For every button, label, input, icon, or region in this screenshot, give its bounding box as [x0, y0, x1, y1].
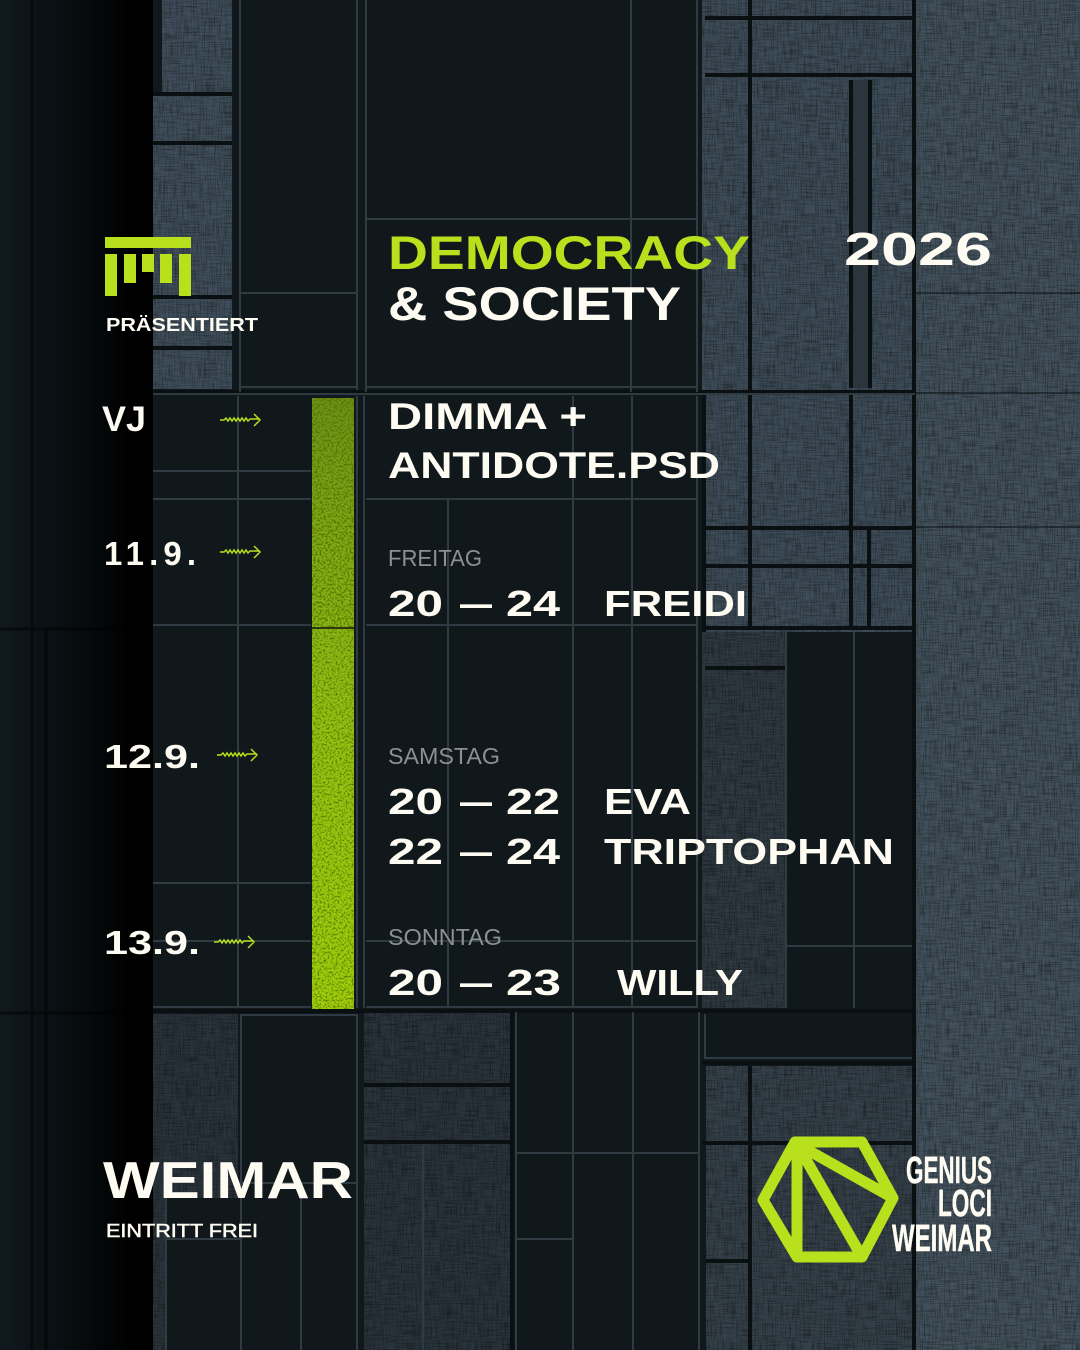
- row: saturday: 12.9.: [104, 738, 200, 775]
- title: democracy and society: & SOCIETY: [388, 277, 681, 330]
- row: saturday: EVA: [604, 781, 691, 822]
- note: free admission: EINTRITT FREI: [106, 1221, 258, 1241]
- row: sunday: —: [460, 962, 492, 1003]
- title: democracy and society: [388, 226, 750, 330]
- row: sunday: 20: [388, 962, 443, 1003]
- row: saturday: —: [460, 831, 492, 872]
- row: saturday: —: [460, 781, 492, 822]
- row: sunday: 13.9.: [104, 924, 200, 961]
- row: saturday: 22: [506, 781, 560, 822]
- row: sunday: [104, 924, 743, 1003]
- venue: weimar: WEIMAR: [103, 1152, 353, 1210]
- row: saturday: 22: [388, 831, 443, 872]
- row: friday: 11.9.: [104, 535, 200, 572]
- row: friday: —: [460, 583, 492, 624]
- row: friday: 20: [388, 583, 443, 624]
- row: sunday: WILLY: [617, 962, 743, 1003]
- row: saturday: [104, 738, 894, 872]
- logo wordmark: genius loci weimar: LOCI: [938, 1183, 992, 1225]
- row: friday: 24: [506, 583, 560, 624]
- row: vj: DIMMA +: [388, 396, 587, 437]
- row: saturday: 20: [388, 781, 443, 822]
- vertical green bar: [312, 398, 354, 1009]
- logo wordmark: genius loci weimar: GENIUS: [906, 1150, 992, 1192]
- row: sunday: 23: [506, 962, 561, 1003]
- logo wordmark: genius loci weimar: [892, 1150, 992, 1260]
- row: sunday: SONNTAG: [388, 924, 502, 950]
- label: präsentiert: PRÄSENTIERT: [106, 315, 258, 335]
- row: vj: ANTIDOTE.PSD: [388, 445, 720, 486]
- row: friday: FREITAG: [388, 545, 482, 571]
- row: saturday: 24: [506, 831, 560, 872]
- logo wordmark: genius loci weimar: WEIMAR: [892, 1218, 992, 1260]
- row: saturday: SAMSTAG: [388, 743, 500, 769]
- row: vj: VJ: [102, 400, 146, 439]
- row: friday: FREIDI: [604, 583, 747, 624]
- title: democracy and society: DEMOCRACY: [388, 226, 750, 279]
- year: 2026: [844, 223, 992, 275]
- row: friday: [104, 535, 747, 624]
- logo: genius loci hexagon: [763, 1142, 893, 1257]
- row: vj: [102, 396, 720, 486]
- row: saturday: TRIPTOPHAN: [604, 831, 894, 872]
- logo: presenter mark: [105, 237, 191, 296]
